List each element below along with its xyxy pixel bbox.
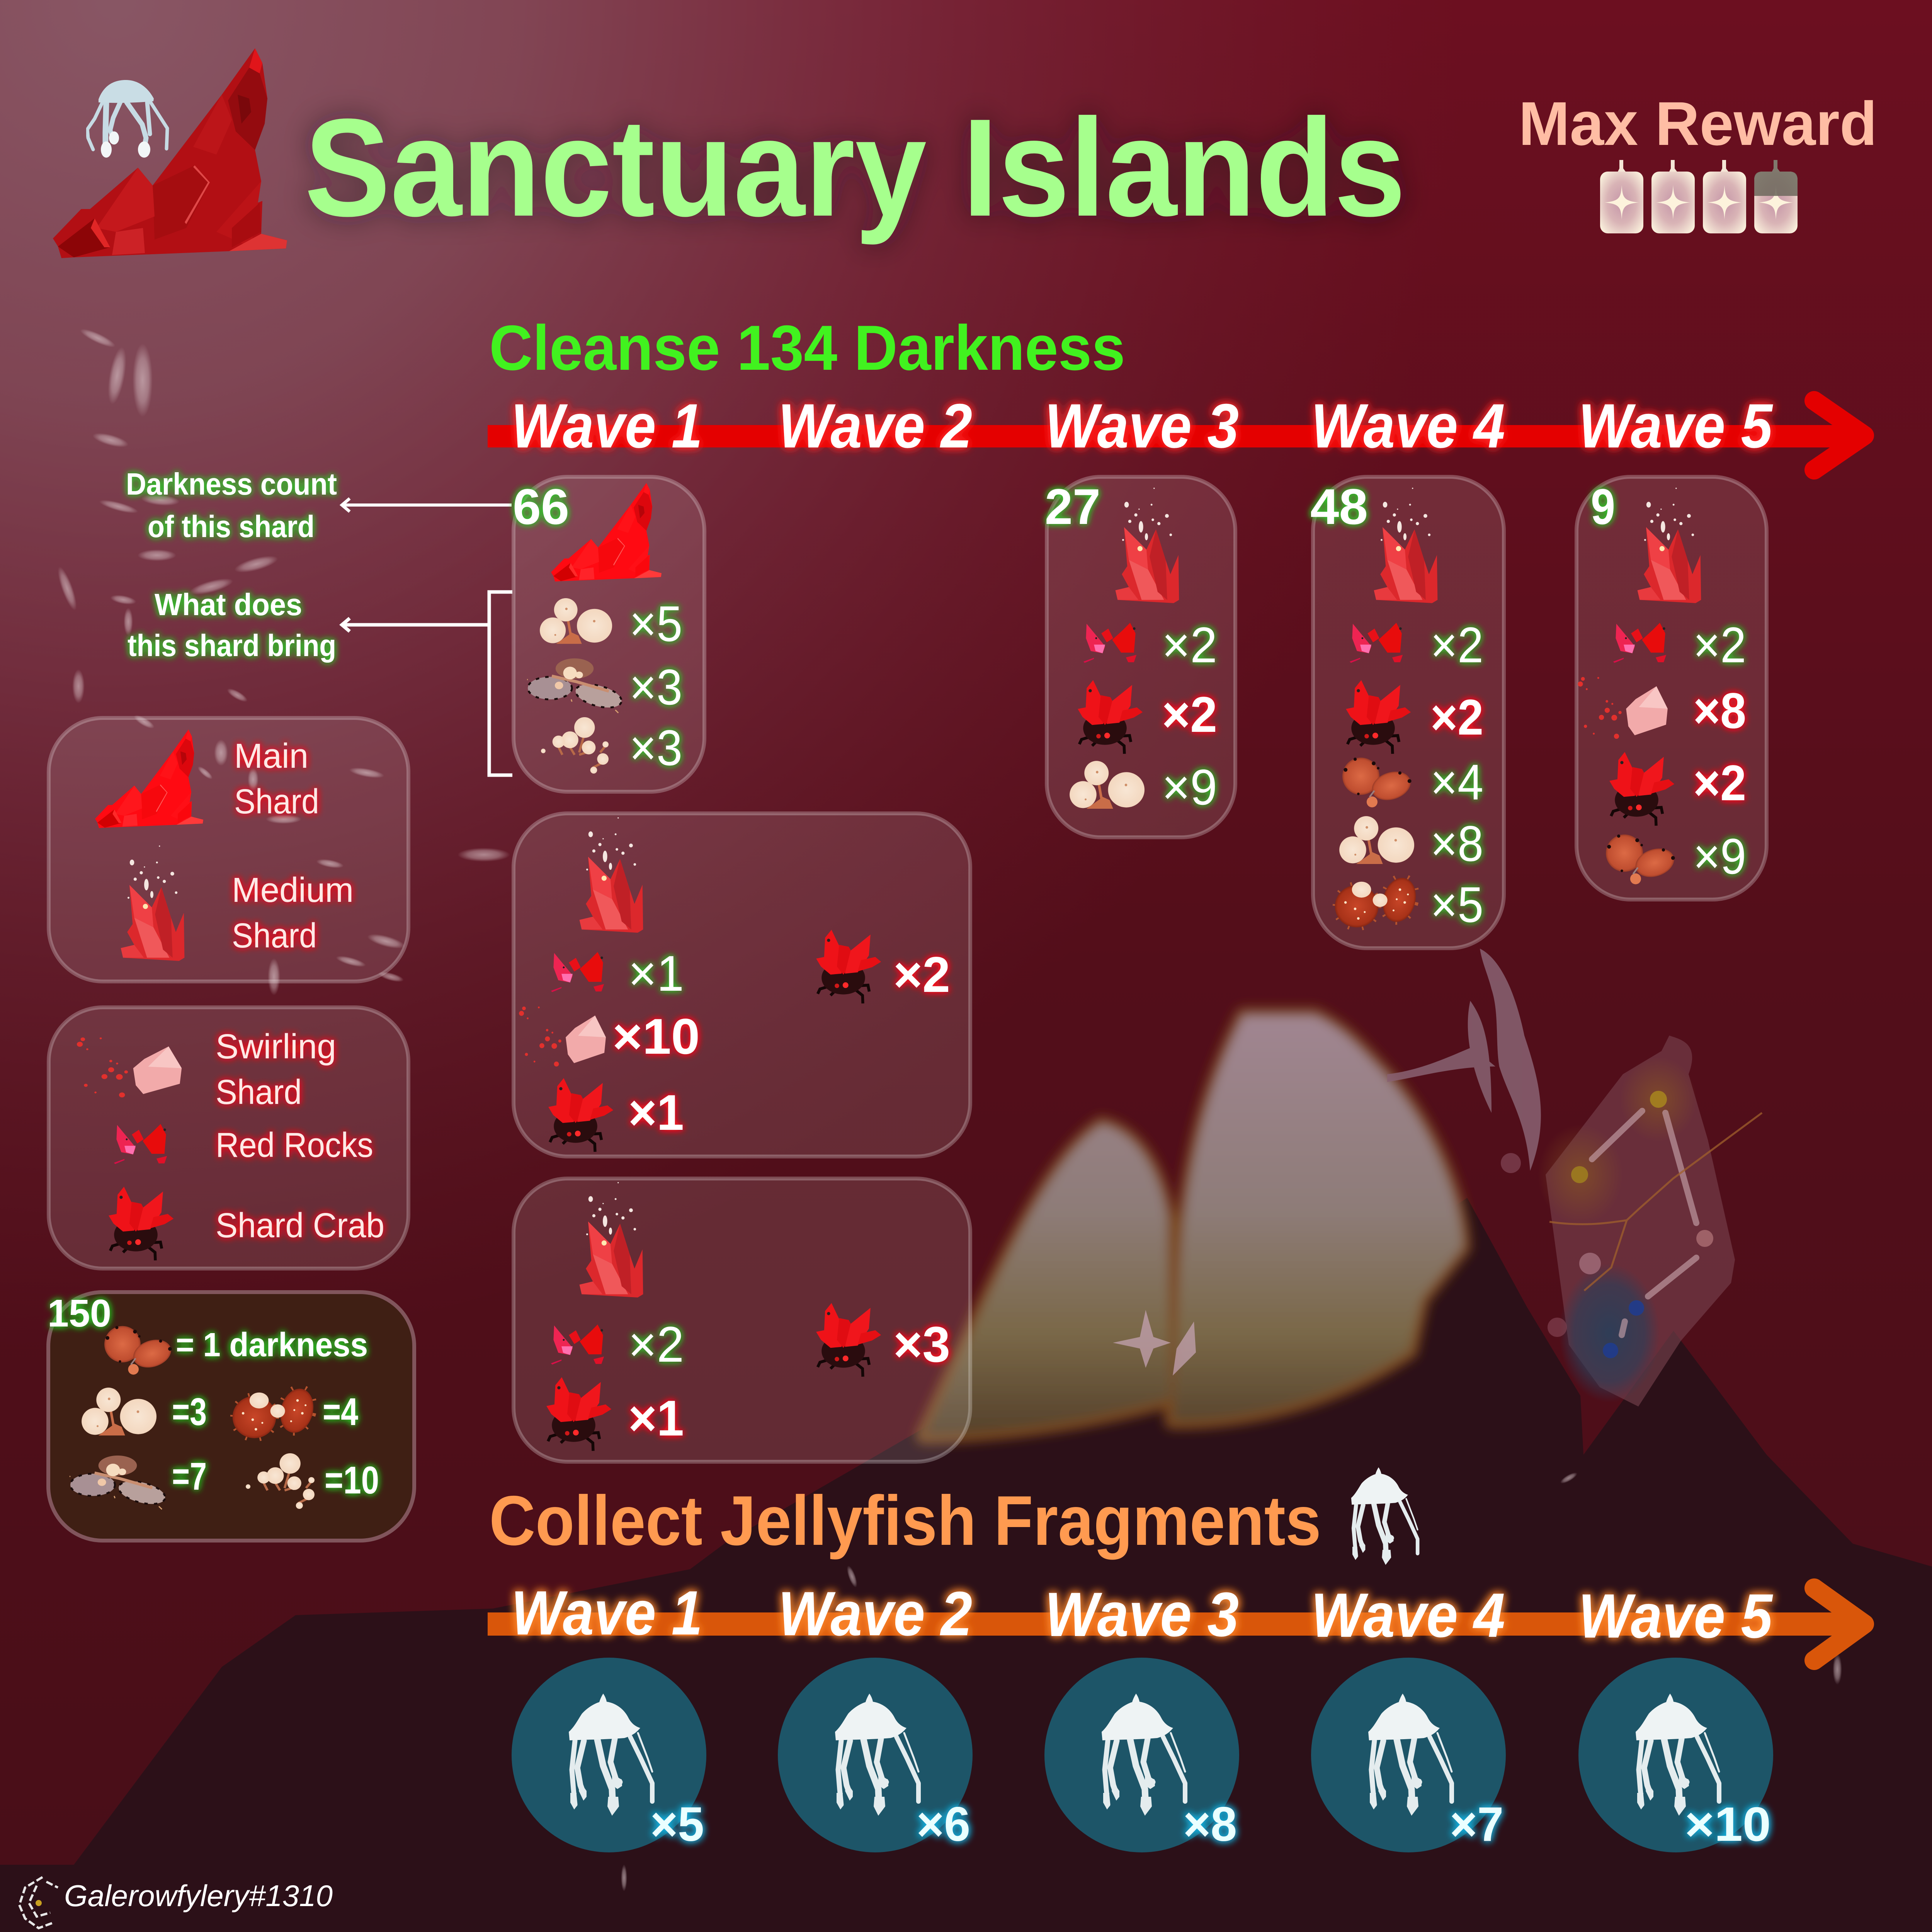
orange wave labels — [511, 1578, 1773, 1651]
author credit: Galerowfylery#1310 — [64, 1879, 333, 1913]
pale rocks — [924, 1016, 1463, 1435]
icon: dark plant — [104, 1326, 175, 1375]
count x2: ×2 — [1693, 617, 1746, 673]
icon: main shard — [551, 483, 662, 582]
orange arrow — [488, 1588, 1864, 1660]
darkness count 9: 9 — [1591, 478, 1615, 535]
small jellyfish icon — [87, 80, 167, 158]
jellyfish wave 5: ×10 — [1685, 1798, 1771, 1851]
sparkle on rocks — [1113, 1310, 1196, 1376]
red wave labels: Wave 5 — [1578, 391, 1773, 461]
icon: jellyfish near heading — [1351, 1467, 1418, 1565]
arrow: shard bring pointer with bracket — [342, 592, 512, 775]
count x2: ×2 — [1162, 617, 1217, 673]
label medium shard: Medium — [232, 871, 354, 910]
candle rating icons — [1600, 160, 1798, 233]
value one darkness: = 1 darkness — [176, 1326, 368, 1364]
value 7: =7 — [172, 1455, 207, 1498]
icon: medium shard — [1116, 488, 1179, 603]
heading: cleanse darkness: Cleanse 134 Darkness — [489, 312, 1125, 383]
annotation: what does this shard bring — [128, 587, 336, 663]
panel: wave 1 third shard — [514, 1179, 970, 1462]
value 10: =10 — [325, 1459, 379, 1502]
max reward block — [1519, 89, 1877, 233]
icon: red rocks — [1350, 623, 1403, 663]
jellyfish wave 2 — [778, 1658, 973, 1852]
orange wave labels: Wave 5 — [1578, 1581, 1773, 1651]
icon: shard crab right — [816, 1303, 881, 1377]
title: Sanctuary Islands — [304, 90, 1406, 246]
count x8 bold: ×8 — [1693, 682, 1746, 739]
icon: shard crab — [1609, 752, 1674, 826]
big main shard icon — [53, 48, 287, 258]
drifting specks — [54, 326, 1842, 1891]
icon: medium shard — [1374, 488, 1437, 603]
darkness count 48: 48 — [1310, 478, 1368, 535]
arrow: darkness count pointer — [342, 498, 512, 512]
darkness count 66: 66 — [513, 478, 569, 535]
right pale rock halo — [1173, 1016, 1463, 1421]
jellyfish wave 1: ×5 — [650, 1798, 704, 1851]
count x1 bold: ×1 — [628, 1390, 684, 1446]
orange wave labels: Wave 1 — [511, 1578, 702, 1648]
red wave labels — [511, 391, 1773, 461]
icon: medium shard — [580, 817, 643, 933]
jellyfish wave 1 — [512, 1658, 706, 1852]
count x9: ×9 — [1162, 759, 1217, 815]
icon: grey darkness plant x3 — [526, 658, 624, 713]
right pale rock — [1173, 1016, 1463, 1421]
darkness count 27: 27 — [1045, 478, 1100, 535]
icon: swirling shard — [1578, 677, 1668, 739]
panel: wave 4 medium shard — [1310, 477, 1504, 948]
icon: grey plant — [69, 1456, 168, 1509]
red wave labels: Wave 1 — [511, 391, 702, 461]
jellyfish wave 4 — [1311, 1658, 1506, 1852]
panel: legend main and medium shard — [49, 718, 408, 981]
icon: small mushrooms x3 — [541, 717, 609, 774]
icon: dark plant — [1606, 835, 1678, 884]
red wave labels: Wave 3 — [1045, 391, 1239, 461]
icon: mushroom cluster x5 — [540, 598, 612, 643]
jellyfish wave 3 — [1044, 1658, 1239, 1852]
icon: red rocks — [1083, 623, 1136, 663]
count x2: ×2 — [628, 1316, 684, 1372]
icon: red rocks — [551, 952, 604, 992]
value 3: =3 — [172, 1390, 207, 1434]
count x2 bold: ×2 — [1162, 686, 1217, 743]
icon: mushrooms — [1070, 761, 1145, 808]
orange wave labels: Wave 2 — [778, 1579, 972, 1649]
icon: red rocks — [551, 1325, 604, 1365]
red wave labels: Wave 4 — [1311, 391, 1505, 461]
icon: shard crab — [1078, 680, 1143, 754]
icon: shard crab — [548, 1078, 613, 1152]
annotation: darkness count: Darkness count — [126, 467, 337, 501]
icon: medium shard — [580, 1182, 643, 1298]
jellyfish wave 5 — [1578, 1658, 1773, 1852]
panel: darkness value legend — [48, 1292, 414, 1541]
icon: spiked plant — [1335, 873, 1421, 928]
panel: wave 5 medium shard — [1577, 477, 1767, 900]
icon: shard crab — [1346, 680, 1411, 754]
value 4: =4 — [323, 1390, 358, 1434]
panel: legend small items — [49, 1007, 408, 1269]
label medium shard: Shard — [232, 917, 317, 955]
label swirling shard: Shard — [216, 1073, 302, 1112]
label main shard — [234, 737, 319, 821]
icon: shard crab — [109, 1187, 173, 1260]
count x10 bold: ×10 — [612, 1008, 700, 1065]
icon: medium shard — [121, 845, 184, 961]
label main shard: Main — [234, 737, 308, 776]
petal creature — [1387, 949, 1541, 1171]
icon: dark plant — [1342, 758, 1414, 808]
panel: wave 1 main shard — [513, 477, 704, 792]
count x3 bold: ×3 — [893, 1316, 950, 1372]
icon: spiked plant — [233, 1384, 319, 1439]
icon: medium shard — [1638, 488, 1701, 603]
icon: swirling shard — [77, 1037, 182, 1097]
icon: red rocks — [114, 1124, 167, 1164]
panel: wave 3 medium shard — [1045, 477, 1235, 837]
panel: wave 1 second shard — [514, 813, 970, 1156]
dark mountain silhouette — [0, 1198, 1932, 1932]
icon: shard crab — [546, 1377, 611, 1451]
icon: red rocks — [1613, 623, 1666, 663]
left pale rock — [924, 1125, 1171, 1435]
label swirling shard — [216, 1027, 336, 1112]
label swirling shard: Swirling — [216, 1027, 336, 1066]
count x2 bold: ×2 — [1430, 689, 1483, 745]
label red rocks: Red Rocks — [216, 1126, 373, 1165]
count x2: ×2 — [1430, 617, 1483, 673]
count x4: ×4 — [1430, 754, 1483, 810]
jellyfish wave 4: ×7 — [1450, 1798, 1503, 1851]
icon: shard crab right — [816, 930, 881, 1003]
red wave labels: Wave 2 — [778, 391, 972, 461]
label shard crab: Shard Crab — [216, 1206, 384, 1245]
orange wave labels: Wave 4 — [1311, 1580, 1505, 1650]
annotation: darkness count: of this shard — [148, 509, 315, 544]
annotation: what does this shard bring: What does — [155, 587, 302, 622]
count x8: ×8 — [1430, 815, 1483, 872]
icon: small mushrooms — [246, 1453, 315, 1509]
icon: mushrooms — [1339, 816, 1414, 863]
jellyfish wave 2: ×6 — [917, 1798, 970, 1851]
annotation: what does this shard bring: this shard bring — [128, 628, 336, 663]
count x5: ×5 — [629, 595, 682, 652]
orange wave labels: Wave 3 — [1045, 1580, 1239, 1650]
count x3: ×3 — [629, 659, 682, 715]
label medium shard — [232, 871, 354, 955]
count x3 second: ×3 — [629, 719, 682, 776]
icon: author constellation badge — [19, 1877, 58, 1928]
count x2 bold: ×2 — [1693, 755, 1746, 811]
orange wave timeline — [488, 1578, 1864, 1660]
count x9: ×9 — [1693, 828, 1746, 884]
count x2 bold: ×2 — [893, 946, 950, 1003]
heading: collect jellyfish fragments: Collect Jellyfish Fragments — [489, 1481, 1321, 1560]
jellyfish wave 3: ×8 — [1183, 1798, 1237, 1851]
count x1 bold: ×1 — [628, 1084, 684, 1141]
count x1: ×1 — [628, 945, 684, 1002]
constellation fragment — [1501, 1036, 1762, 1406]
icon: swirling shard — [519, 1007, 606, 1066]
left pale rock halo — [924, 1125, 1171, 1435]
icon: main shard — [95, 730, 203, 828]
annotation: darkness count — [126, 467, 337, 544]
max reward heading: Max Reward — [1519, 89, 1877, 158]
icon: mushrooms — [82, 1388, 156, 1435]
total 150: 150 — [48, 1292, 111, 1335]
red wave timeline — [488, 391, 1864, 470]
count x5: ×5 — [1430, 876, 1483, 933]
label main shard: Shard — [234, 782, 319, 821]
red arrow — [488, 401, 1864, 470]
